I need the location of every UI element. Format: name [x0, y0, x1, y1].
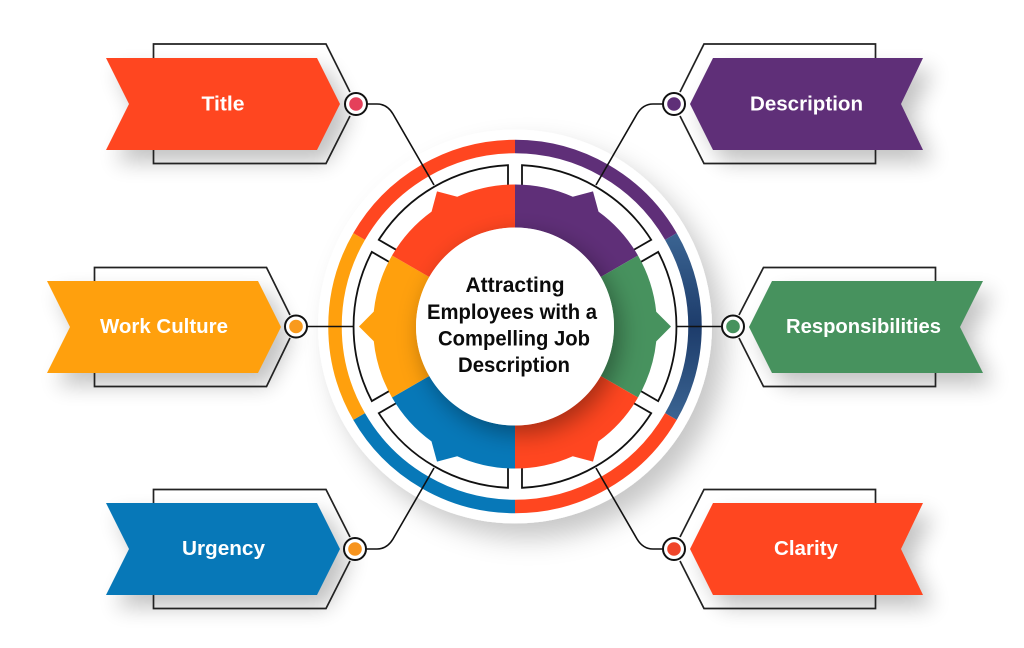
banner: Clarity [663, 490, 933, 608]
banner: Description: Description [750, 94, 863, 116]
node: Description [663, 93, 685, 115]
node: Urgency [344, 538, 366, 560]
banner: Title: Title [202, 94, 244, 116]
centre circle [416, 228, 614, 426]
central disc [281, 101, 723, 552]
node: Clarity [663, 538, 685, 560]
banner: Responsibilities: Responsibilities [786, 316, 941, 338]
node: Work Culture [285, 316, 307, 338]
banner: Description [663, 44, 933, 164]
outer colour ring [281, 101, 695, 552]
central heading [427, 274, 597, 377]
node: Responsibilities [722, 316, 744, 338]
outlined ring segments [307, 128, 723, 525]
banner: Clarity: Clarity [774, 538, 839, 560]
banner: Urgency: Urgency [182, 538, 266, 560]
central heading: Attracting [466, 274, 564, 297]
banner: Work Culture: Work Culture [100, 316, 228, 338]
central heading: Description [458, 354, 570, 377]
central heading: Employees with a [427, 301, 597, 324]
banner: Urgency [106, 490, 366, 608]
gear segments [331, 149, 699, 504]
banner: Responsibilities [722, 268, 993, 386]
node: Title [345, 93, 367, 115]
banner: Title [106, 44, 367, 164]
leader lines [307, 104, 744, 549]
central heading: Compelling Job [438, 328, 590, 350]
banner: Work Culture [47, 268, 307, 386]
